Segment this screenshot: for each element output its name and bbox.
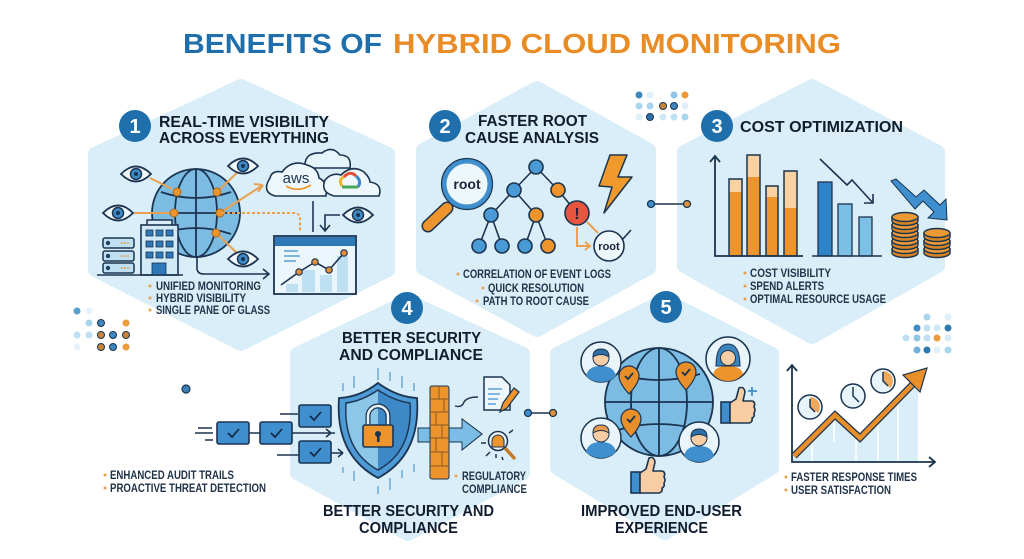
alert magnifier icon — [481, 430, 515, 460]
panel: better security and compliance — [195, 292, 527, 537]
heading 1: ACROSS EVERYTHING — [159, 130, 329, 147]
heading 1 — [159, 114, 329, 147]
lightning bolt — [599, 155, 632, 213]
regulatory compliance list — [454, 471, 527, 496]
eye icons — [103, 158, 373, 266]
response time chart — [787, 365, 935, 467]
panel 3 hexagon background — [684, 86, 938, 337]
decorative dots: left — [74, 308, 190, 393]
multi-cloud icons — [266, 149, 380, 196]
benefits list 2 — [456, 269, 611, 308]
heading 4 — [339, 330, 483, 364]
data stream marks — [343, 368, 414, 494]
title: HYBRID CLOUD MONITORING — [393, 28, 841, 59]
benefits list 3 — [744, 268, 886, 306]
security benefits list: PROACTIVE THREAT DETECTION — [110, 483, 266, 495]
benefits list 2: PATH TO ROOT CAUSE — [483, 296, 589, 308]
connector: panel 2 to 3 — [648, 200, 690, 208]
panel: cost optimization — [684, 86, 950, 337]
connector: panel 4 to 5 — [524, 410, 556, 416]
benefits list 2: QUICK RESOLUTION — [488, 283, 584, 295]
orange cost bar chart — [710, 155, 803, 256]
globe — [605, 348, 713, 456]
response benefits list: FASTER RESPONSE TIMES — [791, 472, 917, 484]
benefits list 3: SPEND ALERTS — [750, 281, 824, 293]
dashboard — [274, 236, 356, 294]
heading 2 — [465, 113, 599, 147]
root found icon — [594, 230, 631, 261]
globe with monitoring nodes — [134, 169, 263, 257]
multi-cloud icons: aws — [283, 170, 309, 187]
benefits list 3: COST VISIBILITY — [750, 268, 831, 280]
root cause tree: ! — [574, 206, 580, 223]
lower heading 4: COMPLIANCE — [359, 520, 458, 537]
badge 1: 1 — [129, 116, 141, 138]
regulatory compliance list: REGULATORY — [462, 471, 526, 483]
document icon — [455, 377, 519, 412]
panel 2 hexagon background — [423, 88, 649, 330]
connector arrows — [197, 201, 340, 279]
badge 2 — [429, 110, 461, 142]
shield with padlock — [339, 383, 417, 478]
badge 4 — [391, 292, 423, 324]
title: BENEFITS OF — [183, 28, 382, 59]
heading 2: FASTER ROOT — [478, 113, 587, 130]
heading 4: AND COMPLIANCE — [339, 347, 483, 364]
building — [141, 220, 178, 275]
regulatory compliance list: COMPLIANCE — [462, 484, 527, 496]
security benefits list: ENHANCED AUDIT TRAILS — [110, 470, 234, 482]
arrow through firewall — [418, 386, 482, 479]
badge 3 — [701, 110, 733, 142]
heading 3: COST OPTIMIZATION — [740, 119, 903, 136]
panel 5 hexagon background — [557, 300, 772, 533]
panel: faster root cause analysis — [423, 88, 649, 330]
thumbs up icons — [631, 387, 757, 493]
benefits list 1 — [148, 281, 270, 317]
security benefits list — [104, 470, 266, 495]
panel: real-time visibility — [95, 86, 388, 344]
badge 2: 2 — [439, 116, 451, 138]
heading 5: EXPERIENCE — [615, 520, 708, 537]
decorative dots: right — [902, 314, 952, 354]
clock icons — [798, 369, 895, 419]
panel: improved end-user experience — [557, 291, 772, 537]
badge 5: 5 — [660, 297, 672, 319]
response benefits list — [784, 472, 917, 497]
heading 2: CAUSE ANALYSIS — [465, 130, 599, 147]
magnifier with root — [428, 158, 492, 226]
lower heading 4: BETTER SECURITY AND — [323, 503, 494, 520]
benefits list 2: CORRELATION OF EVENT LOGS — [463, 269, 611, 281]
heading 1: REAL-TIME VISIBILITY — [159, 114, 329, 131]
benefits list 1: UNIFIED MONITORING — [156, 281, 261, 293]
response benefits list: USER SATISFACTION — [791, 485, 891, 497]
root cause tree — [472, 160, 598, 253]
lower heading 4 — [323, 503, 494, 537]
falling arrow and coins — [891, 179, 950, 258]
flow of approved checks — [195, 405, 343, 463]
heading 5: IMPROVED END-USER — [581, 503, 742, 520]
panel 4 hexagon background — [297, 301, 523, 534]
benefits list 3: OPTIMAL RESOURCE USAGE — [750, 294, 886, 306]
root found icon: root — [598, 241, 620, 253]
heading 4: BETTER SECURITY — [342, 330, 481, 347]
badge 1 — [119, 110, 151, 142]
user avatars — [581, 337, 750, 462]
benefits list 1: HYBRID VISIBILITY — [156, 293, 246, 305]
panel 1 hexagon background — [95, 86, 388, 344]
heading 5 — [581, 503, 742, 537]
location pins — [619, 362, 696, 437]
decorative dots: top — [636, 92, 688, 120]
magnifier with root: root — [453, 176, 481, 192]
server rack — [97, 238, 183, 275]
badge 5 — [650, 291, 682, 323]
title — [183, 28, 841, 59]
blue declining bar chart — [812, 159, 882, 256]
badge 4: 4 — [401, 298, 413, 320]
benefits list 1: SINGLE PANE OF GLASS — [156, 305, 270, 317]
badge 3: 3 — [711, 116, 723, 138]
